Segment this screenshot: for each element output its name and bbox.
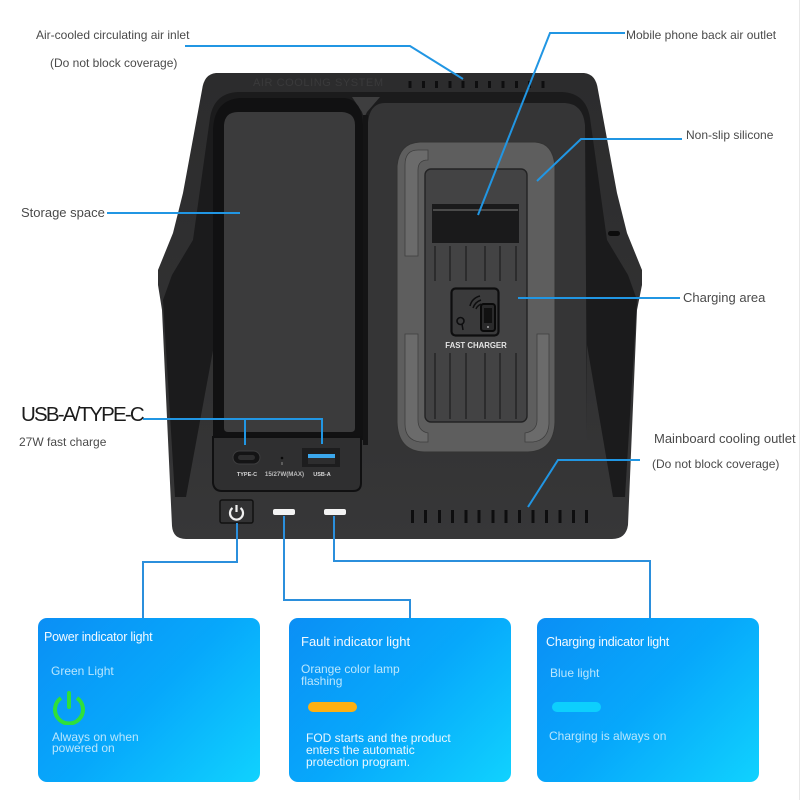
leader: usb ports xyxy=(143,419,322,445)
orange lamp xyxy=(308,702,357,712)
description: enters the automatic xyxy=(306,743,415,757)
description: protection program. xyxy=(306,755,410,769)
fast charger logo: FAST CHARGER xyxy=(445,341,507,350)
port panel: USB-A xyxy=(313,472,331,478)
charging indicator slot xyxy=(324,509,346,515)
side button slot xyxy=(608,231,620,236)
port panel: 15/27W(MAX) xyxy=(265,471,304,478)
label: do not block, mainboard: (Do not block coverage) xyxy=(652,457,779,471)
heading: Fault indicator light xyxy=(301,634,410,649)
top vent slots xyxy=(410,81,543,88)
power button xyxy=(220,500,253,523)
leader: phone back air outlet xyxy=(478,33,625,215)
leader: fault indicator xyxy=(284,516,410,618)
leader: charging indicator xyxy=(334,516,650,618)
colour name: Green Light xyxy=(51,664,114,678)
fault indicator slot xyxy=(273,509,295,515)
colour name: Orange color lamp xyxy=(301,662,400,676)
leader: mainboard outlet xyxy=(528,460,640,507)
icon: usb-a port xyxy=(302,448,340,467)
description: powered on xyxy=(52,740,115,754)
phone back air outlet vent xyxy=(432,204,519,243)
blue lamp xyxy=(552,702,601,712)
leader: air inlet xyxy=(185,46,463,79)
port panel xyxy=(213,437,361,491)
heading: Charging indicator light xyxy=(546,635,669,649)
colour name: Blue light xyxy=(550,666,599,680)
description: FOD starts and the product xyxy=(306,731,451,745)
label: charging area: Charging area xyxy=(683,290,765,305)
heading: Power indicator light xyxy=(44,630,152,644)
label: air inlet: Air-cooled circulating air inlet xyxy=(36,28,189,42)
label: mainboard outlet: Mainboard cooling outlet xyxy=(654,431,796,446)
label: do not block, inlet: (Do not block coverage) xyxy=(50,56,177,70)
panel: charging indicator xyxy=(537,618,759,782)
cooling ribs xyxy=(435,246,516,419)
panel: power indicator xyxy=(38,618,260,782)
colour name: flashing xyxy=(301,674,342,688)
label: phone back air outlet: Mobile phone back air outlet xyxy=(626,28,776,42)
leader: non-slip silicone xyxy=(537,139,682,181)
label: fast charge: 27W fast charge xyxy=(19,435,106,449)
leader: power indicator xyxy=(143,523,237,618)
port panel: TYPE-C xyxy=(237,472,257,478)
storage tray xyxy=(213,98,363,440)
label: storage space: Storage space xyxy=(21,205,105,220)
panel: fault indicator xyxy=(289,618,511,782)
icon: green power xyxy=(53,691,85,725)
icon: type-c port xyxy=(233,451,260,464)
colour name xyxy=(301,662,400,688)
leader: charging area xyxy=(518,297,680,299)
device body xyxy=(158,73,642,539)
description xyxy=(52,730,139,754)
fast charger logo xyxy=(445,288,507,350)
label: non-slip silicone: Non-slip silicone xyxy=(686,128,773,142)
wireless charging tray xyxy=(363,103,587,452)
lower body band xyxy=(214,430,587,522)
description xyxy=(306,731,451,769)
description: Always on when xyxy=(52,730,139,744)
label: usb heading: USB-A/TYPE-C xyxy=(21,403,143,426)
leader: storage space xyxy=(107,212,240,214)
embossed text: AIR COOLING SYSTEM xyxy=(253,77,383,89)
description: Charging is always on xyxy=(549,729,666,743)
bottom vent slots xyxy=(412,510,586,523)
